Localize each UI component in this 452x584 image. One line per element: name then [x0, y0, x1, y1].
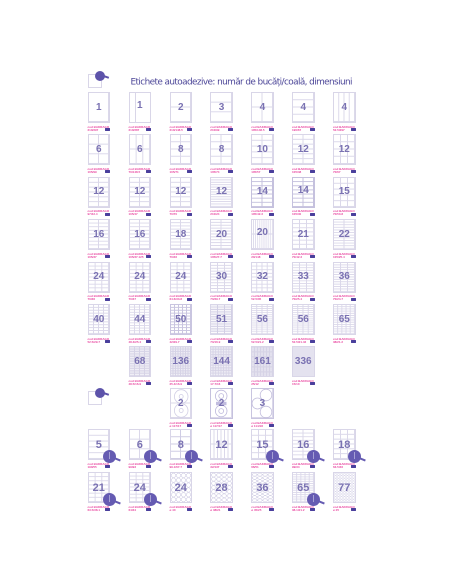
label sheet: 20 per sheet, columns: cod BAKRAGO	[251, 252, 273, 256]
label sheet: 24 per sheet with symbol	[128, 472, 151, 514]
label sheet: 22 per sheet: 105/25.4	[333, 254, 345, 258]
label sheet: 6 per sheet: 6	[96, 144, 102, 154]
label sheet: 4 per sheet, 2 by 2: 4	[260, 102, 265, 112]
label sheet: 8 per sheet: 105/71	[170, 170, 179, 174]
label sheet: 12 per sheet, 3 columns: 12	[339, 144, 350, 154]
label sheet: 136 per sheet	[170, 346, 192, 388]
label sheet: 336 per sheet	[292, 346, 314, 388]
label sheet: 12 per sheet, columns: cod BAKRAGO	[210, 462, 232, 466]
label sheet: 65 per sheet: 65	[339, 314, 350, 324]
title: Etichete autoadezive: număr de bucăți/coală, dimensiuni	[130, 78, 352, 88]
label sheet: 5 per sheet with symbol: cod BAKRAGO	[88, 462, 109, 466]
label sheet: 6 per sheet, columns: 6	[137, 144, 143, 154]
label sheet: 20 per sheet: 105/27.7	[210, 254, 222, 258]
label sheet: 65 per sheet with symbol: 38.1/21.2	[292, 508, 305, 512]
label sheet: 3 per sheet: 210/99	[210, 128, 219, 132]
label sheet: 68 per sheet: 68	[134, 356, 145, 366]
label sheet: 50 per sheet	[170, 304, 192, 344]
label sheet: 36 oval labels: 36	[256, 482, 269, 494]
label sheet: 24 per sheet: cod BAKRAGO	[88, 294, 109, 298]
label sheet: 20 per sheet, columns: 20/148	[251, 254, 260, 258]
label sheet: 1 per sheet: 210/297	[88, 128, 98, 132]
label sheet: 22 per sheet: 22	[339, 228, 350, 240]
label sheet: 28 round labels: cod BAKRAGO	[210, 504, 232, 508]
label sheet: 5 per sheet with symbol: 5	[96, 438, 102, 450]
label sheet: 56 per sheet: 56	[298, 314, 309, 324]
label sheet: 1 per sheet	[88, 92, 110, 132]
label sheet: 18 per sheet	[170, 219, 192, 258]
label sheet: 20 per sheet: cod BAKRAGO	[210, 252, 232, 256]
label sheet: 36 oval labels: ø 45/25	[251, 508, 261, 512]
label sheet: 3 discs: 3	[260, 398, 265, 408]
label sheet: 14 per sheet: 105/42.3	[251, 212, 263, 216]
label sheet: 24 per sheet with symbol: cod BAKRAGO	[128, 504, 150, 508]
label sheet: 65 per sheet with symbol	[292, 472, 314, 514]
label sheet: 33 per sheet	[292, 262, 315, 301]
label sheet: 6 per sheet with symbol: 99/93	[128, 464, 136, 468]
label sheet: 12 per sheet, columns	[210, 429, 233, 471]
label sheet: 20 per sheet: 20	[216, 228, 227, 240]
label sheet: 15 per sheet with symbol: 15	[256, 438, 269, 450]
label sheet: 4 per sheet, rows: 4	[300, 102, 306, 112]
label sheet: 14 per sheet	[292, 177, 315, 216]
label sheet: 24 per sheet	[88, 262, 110, 301]
label sheet: 6 per sheet with symbol: 6	[137, 438, 143, 450]
label sheet: 1 with side strip: 1	[137, 100, 143, 111]
label sheet: 56 per sheet: 52.5/21.2	[251, 340, 264, 344]
label sheet: 1 with side strip: 210/287	[128, 128, 139, 132]
label sheet: 14 per sheet: 105/40	[292, 212, 301, 216]
label sheet: 2 discs with bar: cod BAKRAGO	[210, 420, 232, 424]
label sheet: 12 per sheet, 3 columns	[333, 134, 356, 174]
label sheet: 36 oval labels	[251, 472, 274, 514]
label sheet: 8 per sheet with symbol	[170, 429, 192, 471]
label sheet: 10 per sheet: 105/57	[251, 170, 260, 174]
label sheet: 20 per sheet	[210, 219, 233, 258]
label sheet: 8 per sheet: 8	[178, 144, 184, 154]
label sheet: 1 per sheet: cod BAKRAGO	[88, 124, 109, 128]
label sheet: 44 per sheet: cod BAKRAGO	[128, 336, 150, 340]
label sheet: 12 per sheet: 105/47	[128, 212, 138, 216]
label sheet: 24 per sheet with symbol: 24	[134, 482, 146, 494]
label sheet: 161 per sheet: 161	[254, 356, 271, 366]
label sheet: 15 per sheet	[333, 177, 356, 216]
label sheet: 4 per sheet, rows	[292, 92, 315, 132]
label sheet: 8 per sheet with symbol: 8	[178, 438, 184, 450]
label sheet: 10 per sheet: 10	[257, 144, 268, 154]
label sheet: 30 per sheet	[210, 262, 233, 301]
label sheet: 8 per sheet: 105/74	[210, 170, 219, 174]
label sheet: 77 round labels: 77	[338, 482, 350, 494]
label sheet: 77 round labels	[333, 472, 356, 514]
label sheet: 56 per sheet	[251, 304, 274, 346]
label sheet: 8 per sheet: cod BAKRAGO	[210, 166, 232, 170]
label sheet: 40 per sheet: 52.5/29.7	[88, 340, 100, 344]
label sheet: 24 round labels: cod BAKRAGO	[170, 504, 191, 508]
label sheet: 2 discs with bar: 2	[219, 398, 224, 408]
label sheet: 77 round labels: ø 25	[333, 508, 339, 512]
label sheet: 16 per sheet with symbol	[292, 429, 314, 471]
label sheet: 6 per sheet: 105/99	[88, 170, 97, 174]
label sheet: 24 round labels: ø 40	[170, 508, 176, 512]
label sheet: 24 per sheet with symbol: 64/34	[128, 508, 136, 512]
label sheet: 6 per sheet: cod BAKRAGO	[88, 166, 109, 170]
label sheet: 24 round labels: 24	[175, 482, 187, 494]
label sheet: 30 per sheet: 30	[216, 271, 227, 282]
label sheet: 21 per sheet with symbol: 63.5/38.1	[88, 508, 100, 512]
label sheet: 1 with side strip: cod BAKRAGO	[128, 124, 150, 128]
label sheet: 12 per sheet, rows	[210, 177, 233, 216]
label sheet: 56 per sheet: 52.5/21.42	[292, 340, 306, 344]
label sheet: 12 per sheet, rows: cod BAKRAGO	[210, 209, 232, 213]
label sheet: 4 per sheet, rows: cod BAKRAGO	[292, 124, 314, 128]
label sheet: 6 per sheet, columns: 70/148.5	[128, 170, 140, 174]
label sheet: 144 per sheet: 144	[213, 356, 230, 366]
label sheet: 24 per sheet: 24	[93, 271, 104, 282]
label sheet: 24 per sheet	[170, 262, 192, 301]
label sheet: 4 per sheet, rows: 190/67	[292, 128, 301, 132]
label sheet: 6 per sheet	[88, 134, 110, 174]
label sheet: 44 per sheet: 48.3/25.4	[128, 340, 141, 344]
label sheet: 5 per sheet with symbol: 190/55	[88, 464, 97, 468]
label sheet: 12 per sheet	[88, 177, 110, 216]
label sheet: 12 per sheet: cod BAKRAGO	[128, 209, 150, 213]
label sheet: 16 per sheet: 105/37.125	[128, 254, 144, 258]
label sheet: 3 discs: cod BAKRAGO	[251, 420, 273, 424]
label sheet: 10 per sheet	[251, 134, 274, 174]
label sheet: 44 per sheet	[128, 304, 151, 344]
label sheet: 14 per sheet	[251, 177, 274, 216]
label sheet: 15 per sheet: 15	[339, 186, 350, 197]
label sheet: 12 per sheet	[128, 177, 151, 216]
label sheet: 136 per sheet: 136	[172, 356, 189, 366]
label sheet: 12 per sheet: 12	[175, 186, 186, 197]
label sheet: 15 per sheet with symbol: cod BAKRAGO	[251, 462, 273, 466]
label sheet: 3 per sheet: cod BAKRAGO	[210, 124, 232, 128]
label sheet: 21 per sheet: 70/42.3	[292, 254, 302, 258]
label sheet: 14 per sheet: cod BAKRAGO	[251, 209, 273, 213]
label sheet: 77 round labels: cod BAKRAGO	[333, 504, 355, 508]
label sheet: 3 discs: ø 114/18	[251, 424, 263, 428]
label sheet: 2 discs with bar: ø 117/17	[210, 424, 222, 428]
label sheet: 16 per sheet: cod BAKRAGO	[88, 252, 109, 256]
label sheet: 12 per sheet: 12	[134, 186, 145, 197]
label sheet: 14 per sheet: 14	[257, 186, 268, 197]
label sheet: 36 oval labels: cod BAKRAGO	[251, 504, 273, 508]
label sheet: 28 round labels: 28	[215, 482, 228, 494]
label sheet: 40 per sheet: cod BAKRAGO	[88, 336, 109, 340]
label sheet: 50 per sheet: 42/29.7	[170, 340, 180, 344]
label sheet: 50 per sheet: cod BAKRAGO	[170, 336, 191, 340]
label sheet: 18 per sheet: 18	[175, 228, 186, 240]
label sheet: 24 per sheet: 70/37	[128, 297, 136, 301]
label sheet: 136 per sheet: cod BAKRAGO	[170, 378, 191, 382]
label sheet: 15 per sheet: 70/50.8	[333, 212, 343, 216]
label sheet: 8 per sheet: 8	[219, 144, 224, 154]
label sheet: 1 per sheet: 1	[96, 102, 102, 112]
label sheet: 12 per sheet, rows: 12	[216, 186, 227, 197]
label sheet: 65 per sheet	[333, 304, 356, 346]
label sheet: 20 per sheet, columns	[251, 219, 274, 258]
label sheet: 51 per sheet: 51	[216, 314, 227, 324]
label sheet: 4 per sheet, 2 by 2: cod BAKRAGO	[251, 124, 273, 128]
label sheet: 161 per sheet: 25/12	[251, 382, 259, 386]
label sheet: 8 per sheet	[170, 134, 192, 174]
label sheet: 24 per sheet: 24	[134, 271, 145, 282]
label sheet: 68 per sheet: 48.5/16.9	[128, 382, 141, 386]
label sheet: 144 per sheet: cod BAKRAGO	[210, 378, 232, 382]
label sheet: 4 per sheet, columns: cod BAKRAGO	[333, 124, 355, 128]
label sheet: 32 per sheet	[251, 262, 274, 301]
label sheet: 12 per sheet, columns: 32/137	[210, 464, 219, 468]
label sheet: 21 per sheet	[292, 219, 315, 258]
label sheet: 336 per sheet: 336	[295, 356, 312, 366]
label sheet: 16 per sheet	[88, 219, 110, 258]
label sheet: 28 round labels: ø 38/21	[210, 508, 220, 512]
label sheet: 12 per sheet: 105/48	[292, 170, 301, 174]
label sheet: 44 per sheet: 44	[134, 314, 145, 324]
label sheet: 8 per sheet with symbol: 99.1/67.7	[170, 464, 182, 468]
label sheet: 2 discs with corners: cod BAKRAGO	[170, 420, 191, 424]
label sheet: 36 per sheet	[333, 262, 356, 301]
label sheet: 24 per sheet: cod BAKRAGO	[128, 294, 150, 298]
label sheet: 12 per sheet	[170, 177, 192, 216]
label sheet: 18 per sheet: 70/46	[170, 254, 177, 258]
label sheet: 15 per sheet with symbol: 66/51	[251, 464, 259, 468]
label sheet: 336 per sheet: cod BAKRAGO	[292, 378, 314, 382]
label sheet: 2 discs with corners: ø 117/17	[170, 424, 181, 428]
label sheet: 3 per sheet: 3	[219, 102, 224, 112]
label sheet: 16 per sheet: 16	[93, 228, 104, 240]
label sheet: 65 per sheet: 38/21.2	[333, 340, 343, 344]
label sheet: 12 per sheet, 3 columns: cod BAKRAGO	[333, 166, 355, 170]
label sheet: 12 per sheet: 97/42.4	[88, 212, 98, 216]
label sheet: 161 per sheet: cod BAKRAGO	[251, 378, 273, 382]
label sheet: 24 per sheet: cod BAKRAGO	[170, 294, 191, 298]
label sheet: 2 discs with corners: 2	[178, 398, 184, 408]
label sheet: 33 per sheet: 70/25.4	[292, 297, 302, 301]
label sheet: 16 per sheet with symbol: 16	[297, 438, 309, 450]
label sheet: 12 per sheet: 12	[298, 144, 309, 154]
label sheet: 12 per sheet, rows: 210/24	[210, 212, 219, 216]
label sheet: 28 round labels	[210, 472, 233, 514]
label sheet: 12 per sheet: cod BAKRAGO	[292, 166, 314, 170]
label sheet: 24 per sheet: 70/36	[88, 297, 95, 301]
label sheet: 56 per sheet	[292, 304, 314, 346]
label sheet: 32 per sheet: 32	[257, 271, 268, 282]
label sheet: 5 per sheet with symbol	[88, 429, 110, 471]
label sheet: 12 per sheet, 3 columns: 70/67	[333, 170, 341, 174]
label sheet: 16 per sheet: 16	[134, 228, 145, 240]
label sheet: 144 per sheet: 17.7/16	[210, 382, 220, 386]
label sheet: 16 per sheet	[128, 219, 151, 258]
label sheet: 2 per sheet: cod BAKRAGO	[170, 124, 191, 128]
label sheet: 40 per sheet	[88, 304, 110, 344]
label sheet: 12 per sheet: cod BAKRAGO	[88, 209, 109, 213]
label sheet: 40 per sheet: 40	[93, 314, 104, 324]
label sheet: 32 per sheet: cod BAKRAGO	[251, 294, 273, 298]
label sheet: 336 per sheet: 15/10	[292, 382, 300, 386]
label sheet: 68 per sheet: cod BAKRAGO	[128, 378, 150, 382]
label sheet: 16 per sheet with symbol: cod BAKRAGO	[292, 462, 314, 466]
label sheet: 24 per sheet: 24	[175, 271, 186, 282]
label sheet: 24 per sheet: 64.6/33.8	[170, 297, 182, 301]
label sheet: 8 per sheet with symbol: cod BAKRAGO	[170, 462, 191, 466]
label sheet: 2 per sheet	[170, 92, 192, 132]
label sheet: 20 per sheet, columns: 20	[257, 227, 268, 238]
label sheet: 68 per sheet	[128, 346, 151, 388]
label sheet: 12 per sheet: 12	[93, 186, 104, 197]
label sheet: 6 per sheet with symbol: cod BAKRAGO	[128, 462, 150, 466]
label sheet: 4 per sheet, columns	[333, 92, 356, 132]
label sheet: 15 per sheet: cod BAKRAGO	[333, 209, 355, 213]
label sheet: 14 per sheet: 14	[298, 185, 309, 196]
label sheet: 16 per sheet: cod BAKRAGO	[128, 252, 150, 256]
label sheet: 65 per sheet with symbol: cod BAKRAGO	[292, 504, 314, 508]
label sheet: 3 per sheet	[210, 92, 233, 132]
label sheet: 161 per sheet	[251, 346, 274, 388]
label sheet: 10 per sheet: cod BAKRAGO	[251, 166, 273, 170]
label sheet: 24 per sheet	[128, 262, 151, 301]
label sheet: 6 per sheet, columns	[128, 134, 151, 174]
icon: header hand symbol	[88, 71, 110, 88]
label sheet: 4 per sheet, 2 by 2: 105/148.5	[251, 128, 265, 132]
label sheet: 14 per sheet: cod BAKRAGO	[292, 209, 314, 213]
label sheet: 136 per sheet: 25.4/16.9	[170, 382, 182, 386]
label sheet: 18 per sheet with symbol	[333, 429, 356, 471]
label sheet: 18 per sheet with symbol: 63.5/46	[333, 464, 343, 468]
label sheet: 4 per sheet, 2 by 2	[251, 92, 274, 132]
label sheet: 22 per sheet: cod BAKRAGO	[333, 252, 355, 256]
label sheet: 144 per sheet	[210, 346, 233, 388]
label sheet: 21 per sheet with symbol: cod BAKRAGO	[88, 504, 109, 508]
label sheet: 4 per sheet, columns: 52.5/297	[333, 128, 345, 132]
label sheet: 51 per sheet: cod BAKRAGO	[210, 336, 232, 340]
label sheet: 21 per sheet: 21	[298, 228, 309, 240]
label sheet: 3 discs	[251, 388, 274, 430]
label sheet: 32 per sheet: 52.5/35	[251, 297, 261, 301]
label sheet: 12 per sheet	[292, 134, 315, 174]
label sheet: 18 per sheet with symbol: cod BAKRAGO	[333, 462, 355, 466]
label sheet: 51 per sheet	[210, 304, 233, 346]
label sheet: 2 per sheet: 2	[178, 102, 184, 112]
label sheet: 36 per sheet: 36	[339, 271, 350, 282]
label sheet: 21 per sheet with symbol	[88, 472, 110, 514]
label sheet: 4 per sheet, columns: 4	[341, 102, 347, 112]
label sheet: 12 per sheet: cod BAKRAGO	[170, 209, 191, 213]
label sheet: 56 per sheet: cod BAKRAGO	[251, 336, 273, 340]
label sheet: 65 per sheet: cod BAKRAGO	[333, 336, 355, 340]
label sheet: 56 per sheet: cod BAKRAGO	[292, 336, 314, 340]
label sheet: 36 per sheet: 70/24.7	[333, 297, 343, 301]
label sheet: 6 per sheet, columns: cod BAKRAGO	[128, 166, 150, 170]
label sheet: 33 per sheet: cod BAKRAGO	[292, 294, 314, 298]
icon: round labels hand symbol	[88, 388, 110, 404]
label sheet: 24 round labels	[170, 472, 192, 514]
label sheet: 2 discs with bar	[210, 388, 233, 430]
label sheet: 56 per sheet: 56	[257, 314, 268, 324]
label sheet: 36 per sheet: cod BAKRAGO	[333, 294, 355, 298]
label sheet: 2 discs with corners	[170, 388, 192, 430]
label sheet: 8 per sheet	[210, 134, 233, 174]
label sheet: 16 per sheet: 105/37	[88, 254, 97, 258]
label sheet: 50 per sheet: 50	[175, 314, 186, 324]
label sheet: 33 per sheet: 33	[298, 271, 309, 282]
label sheet: 51 per sheet: 70/16.9	[210, 340, 220, 344]
label sheet: 18 per sheet with symbol: 18	[338, 438, 350, 450]
label sheet: 16 per sheet with symbol: 99/34	[292, 464, 300, 468]
label sheet: 30 per sheet: cod BAKRAGO	[210, 294, 232, 298]
label sheet: 8 per sheet: cod BAKRAGO	[170, 166, 191, 170]
label sheet: 30 per sheet: 70/29.7	[210, 297, 220, 301]
label sheet: 18 per sheet: cod BAKRAGO	[170, 252, 191, 256]
label sheet: 15 per sheet with symbol	[251, 429, 274, 471]
label sheet: 12 per sheet, columns: 12	[215, 438, 228, 450]
label sheet: 22 per sheet	[333, 219, 356, 258]
label sheet: 21 per sheet with symbol: 21	[93, 482, 105, 494]
label sheet: 21 per sheet: cod BAKRAGO	[292, 252, 314, 256]
label sheet: 2 per sheet: 210/148.5	[170, 128, 183, 132]
label sheet: 6 per sheet with symbol	[128, 429, 151, 471]
label sheet: 12 per sheet: 70/70	[170, 212, 177, 216]
label sheet: 1 with side strip	[128, 92, 151, 132]
label sheet: 65 per sheet with symbol: 65	[297, 482, 309, 494]
